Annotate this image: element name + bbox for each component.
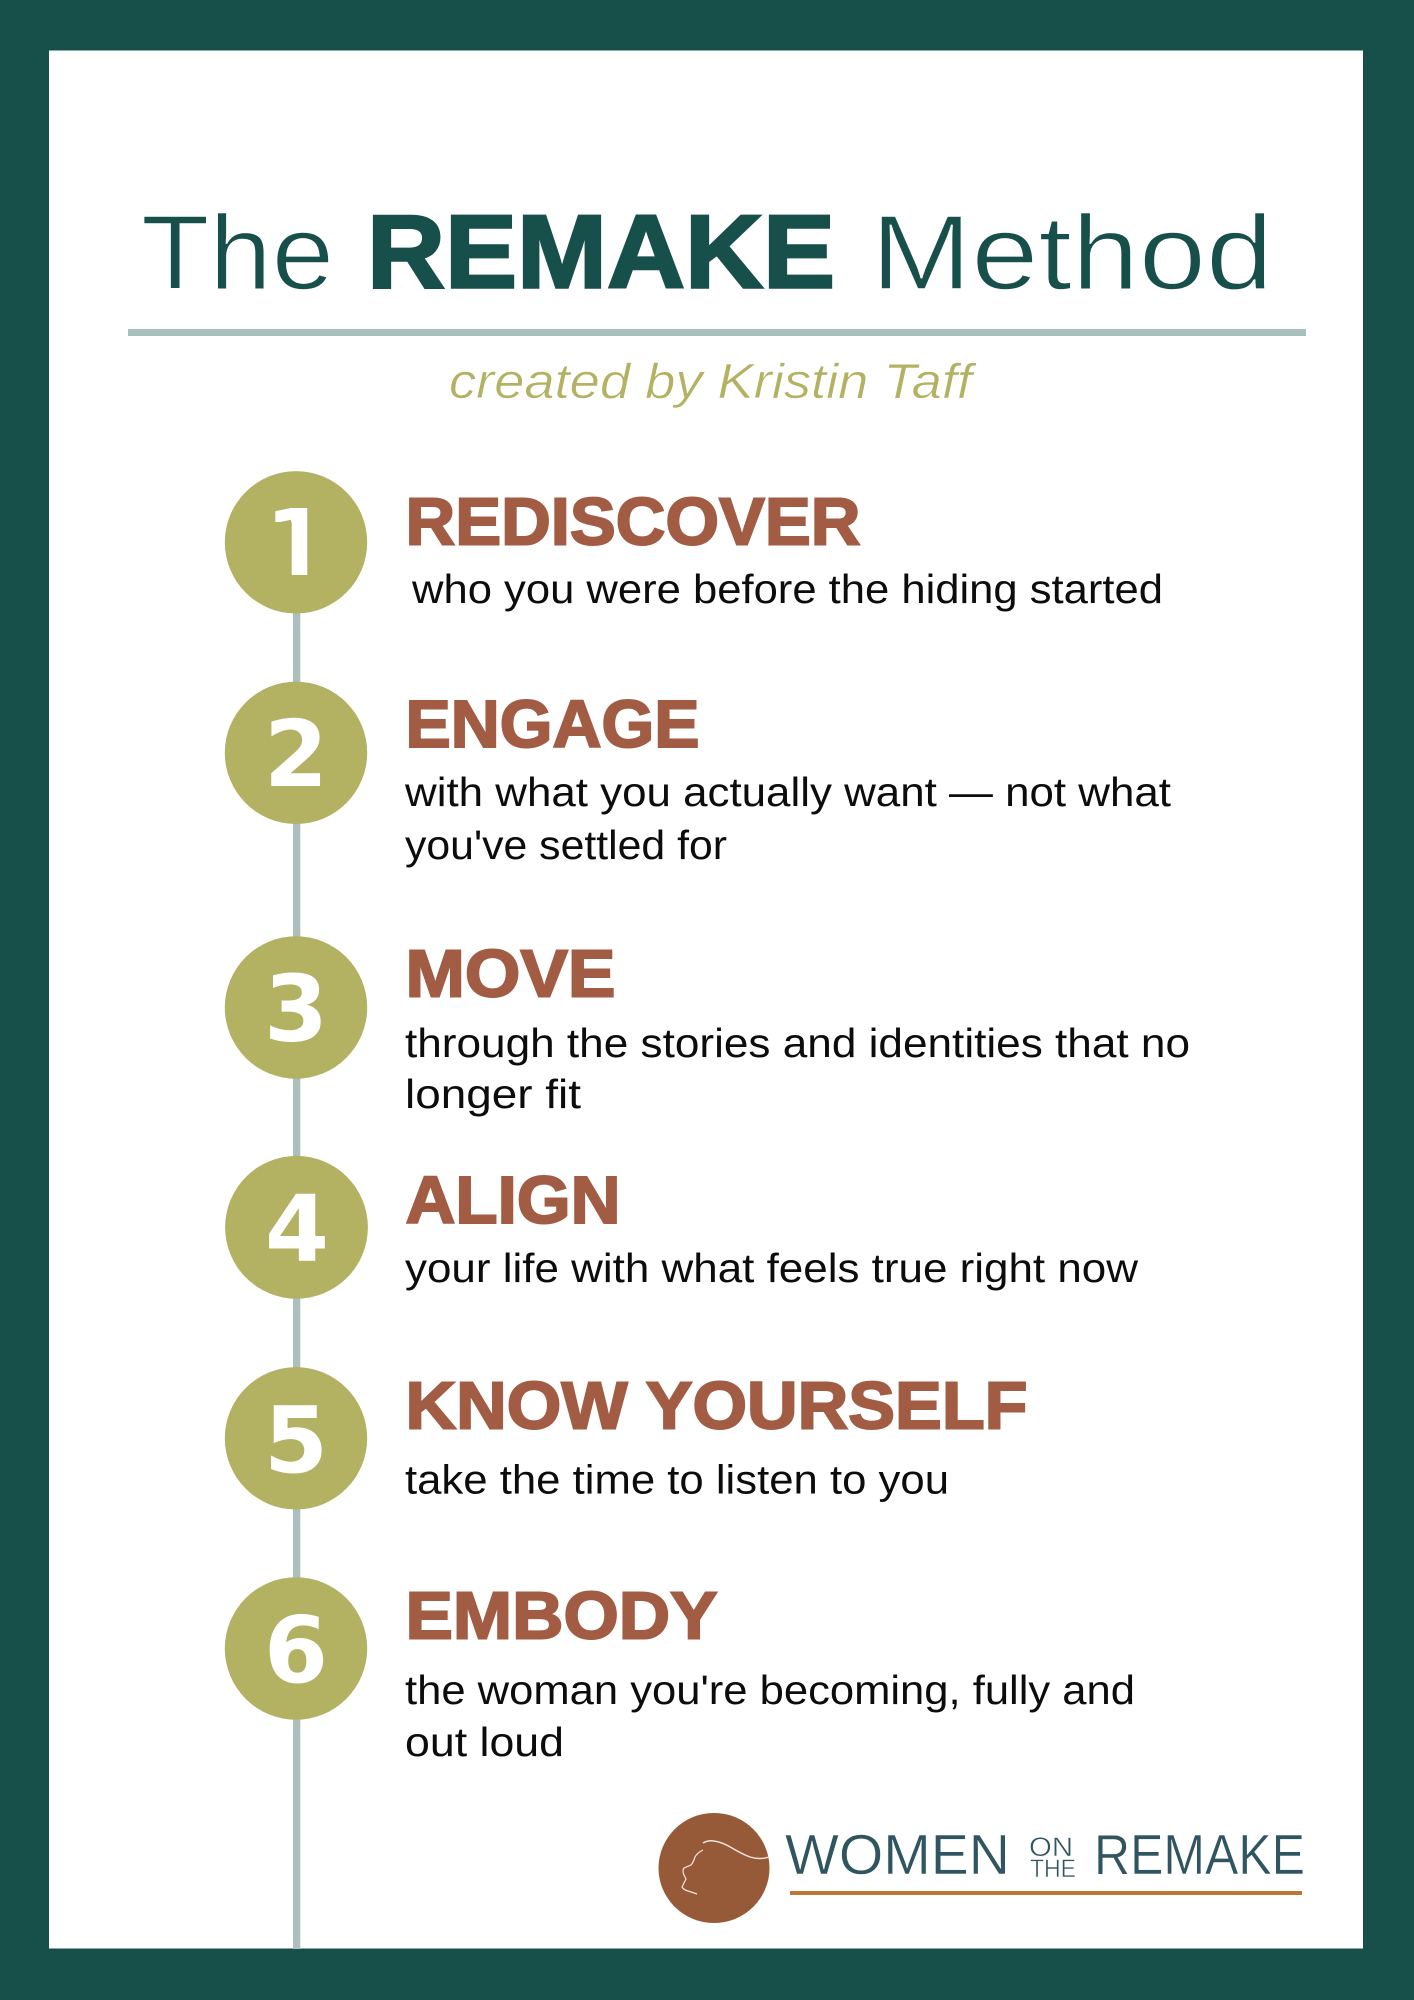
logo wordmark: THE bbox=[1030, 1855, 1076, 1883]
description 6 bbox=[405, 1667, 1135, 1765]
number badge 6: 6 bbox=[264, 1597, 328, 1704]
description 2: you've settled for bbox=[405, 822, 727, 868]
logo underline bbox=[790, 1891, 1302, 1895]
number badge 2 bbox=[225, 682, 367, 824]
heading rediscover: REDISCOVER bbox=[406, 484, 860, 560]
timeline connector line bbox=[293, 600, 300, 1949]
description 3 bbox=[405, 1020, 1190, 1117]
title: The bbox=[141, 194, 334, 312]
logo wordmark bbox=[785, 1823, 1305, 1887]
description 6: out loud bbox=[405, 1719, 564, 1765]
step 4: align bbox=[225, 1156, 1138, 1299]
heading move: MOVE bbox=[406, 936, 616, 1012]
description 1: who you were before the hiding started bbox=[411, 566, 1163, 612]
heading align: ALIGN bbox=[406, 1163, 620, 1238]
step 3: move bbox=[225, 936, 1190, 1117]
number badge 5: 5 bbox=[264, 1387, 328, 1494]
step 6: embody bbox=[225, 1577, 1135, 1765]
number badge 1: 1 bbox=[265, 490, 329, 597]
logo: women on the remake bbox=[658, 1813, 1305, 1923]
heading embody: EMBODY bbox=[406, 1578, 718, 1654]
logo wordmark: ON bbox=[1029, 1832, 1073, 1862]
description 6: the woman you're becoming, fully and bbox=[405, 1667, 1135, 1713]
number badge 5 bbox=[225, 1367, 367, 1510]
number badge 1 bbox=[225, 471, 367, 614]
number badge 6 bbox=[225, 1577, 367, 1720]
step 2: engage bbox=[225, 682, 1172, 868]
title bbox=[141, 194, 1273, 312]
heading know yourself: KNOW YOURSELF bbox=[406, 1368, 1028, 1443]
description 3: longer fit bbox=[405, 1071, 582, 1117]
title: REMAKE bbox=[367, 195, 835, 311]
description 5: take the time to listen to you bbox=[405, 1456, 949, 1502]
logo wordmark: REMAKE bbox=[1094, 1823, 1305, 1887]
number badge 3 bbox=[225, 936, 367, 1079]
subtitle: created by Kristin Taff bbox=[449, 355, 977, 409]
description 2 bbox=[404, 769, 1172, 868]
step 1: rediscover bbox=[225, 471, 1163, 614]
description 3: through the stories and identities that no bbox=[405, 1020, 1190, 1066]
description 4: your life with what feels true right now bbox=[405, 1245, 1138, 1291]
step 5: know yourself bbox=[225, 1367, 1028, 1510]
heading engage: ENGAGE bbox=[406, 687, 700, 762]
description 2: with what you actually want — not what bbox=[404, 769, 1172, 815]
title underline rule bbox=[128, 329, 1306, 336]
title: Method bbox=[871, 194, 1273, 312]
number badge 2: 2 bbox=[264, 701, 328, 808]
icon: rust circle with face profile bbox=[658, 1813, 770, 1923]
number badge 4 bbox=[225, 1156, 368, 1299]
number badge 3: 3 bbox=[264, 956, 328, 1062]
number badge 4: 4 bbox=[265, 1176, 329, 1283]
logo wordmark: WOMEN bbox=[785, 1823, 1010, 1887]
